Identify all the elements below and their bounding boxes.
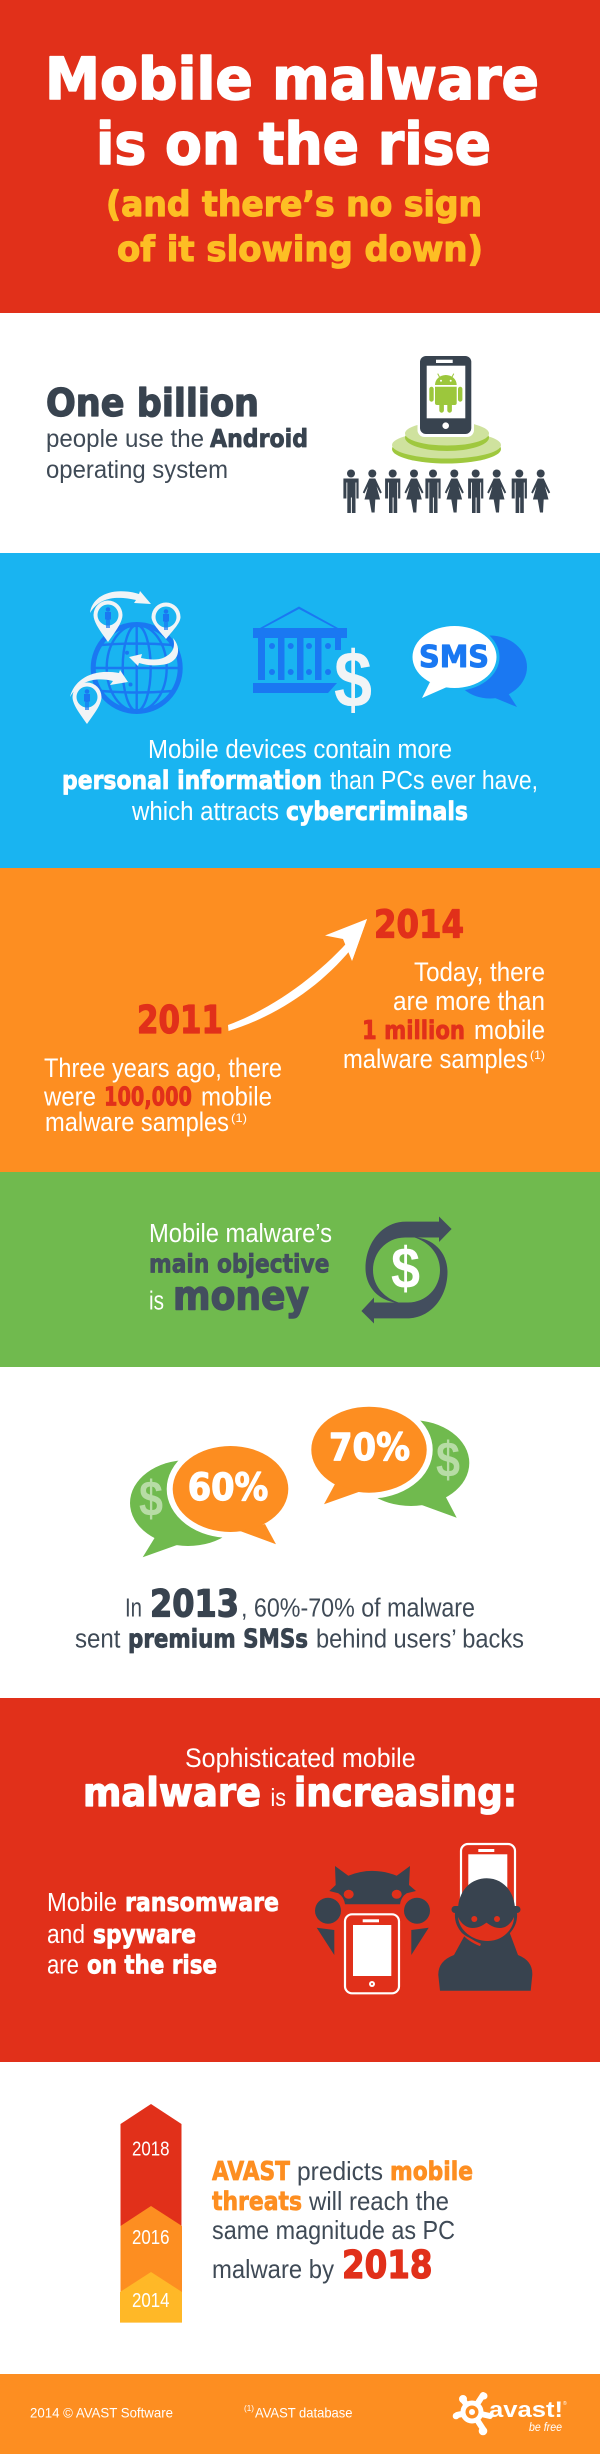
text block: 2013 premium SMS: 2013 <box>150 1583 239 1626</box>
text block: personal information: cybercriminals <box>286 797 468 827</box>
text block: main objective: main objective <box>149 1250 330 1280</box>
panel: one billion android users <box>0 313 600 553</box>
chart: rising arrow 2014 to 2018: 2018 <box>132 2139 170 2161</box>
text block: prediction: 2018 <box>342 2243 432 2287</box>
text block: personal information <box>62 736 538 827</box>
text block: three years ago: (1) <box>231 1111 247 1125</box>
text block: main objective: money <box>173 1274 309 1320</box>
text block: three years ago: Three years ago, there <box>44 1053 282 1083</box>
text block: prediction <box>212 2156 473 2287</box>
text block: 2013 premium SMS: In <box>125 1595 142 1623</box>
panel: personal information <box>0 553 600 868</box>
heading: malware increasing <box>83 1743 517 1816</box>
panel: title header <box>0 0 600 313</box>
text block: 2013 premium SMS <box>75 1583 524 1655</box>
heading: malware increasing: increasing: <box>294 1771 517 1816</box>
chart: rising arrow 2014 to 2018: 2014 <box>132 2290 170 2312</box>
text block: today: malware samples <box>343 1044 528 1074</box>
text block: personal information: than PCs ever have, <box>330 767 538 795</box>
text block: main objective: is <box>149 1288 164 1316</box>
text block: ransomware and spyware: on the rise <box>87 1950 217 1980</box>
logo: avast: avast! <box>489 2397 563 2422</box>
icon: 70% speech bubbles: $ <box>436 1432 460 1488</box>
icon: money cycle arrows <box>361 1216 452 1324</box>
text block: android users: people use the <box>46 425 204 453</box>
source note: AVAST database <box>255 2405 353 2421</box>
text block: android users <box>46 424 308 484</box>
panel: footer <box>0 2374 600 2454</box>
text block: 2013 premium SMS: , 60%-70% of malware <box>241 1595 475 1623</box>
text block: prediction: AVAST <box>212 2157 290 2187</box>
text block: main objective <box>149 1220 332 1320</box>
subtitle: (and there’s no sign <box>106 185 482 225</box>
icon: 70% speech bubbles <box>311 1407 469 1518</box>
logo: avast: ® <box>563 2400 567 2407</box>
icon: bank with dollar: $ <box>334 635 372 724</box>
title: Mobile malware <box>45 45 539 113</box>
panel: sophisticated malware <box>0 1698 600 2062</box>
icon: 60% speech bubbles: 60% <box>188 1466 268 1509</box>
text block: prediction: threats <box>212 2187 302 2217</box>
text block: today: Today, there <box>414 957 545 987</box>
text block: three years ago: malware samples <box>45 1107 229 1137</box>
text block: ransomware and spyware: spyware <box>93 1920 196 1950</box>
text block: prediction: same magnitude as PC <box>212 2215 455 2245</box>
icon: 60% speech bubbles <box>130 1446 288 1557</box>
text block: 2013 premium SMS: sent <box>75 1626 120 1654</box>
text block: 2013 premium SMS: premium SMSs <box>128 1625 308 1655</box>
text block: 2013 premium SMS: behind users’ backs <box>316 1626 524 1654</box>
text block: three years ago: were <box>43 1082 96 1112</box>
text block: today: mobile <box>474 1015 545 1045</box>
text block: android users: operating system <box>46 456 228 484</box>
text block: three years ago: mobile <box>201 1082 272 1112</box>
subtitle <box>106 185 483 270</box>
icon: SMS speech bubbles: SMS <box>419 640 489 675</box>
icon: phone on podium <box>392 356 501 464</box>
text block: prediction: mobile <box>390 2157 473 2187</box>
heading: malware increasing: Sophisticated mobile <box>185 1743 416 1773</box>
text block: main objective: Mobile malware’s <box>149 1220 332 1248</box>
panel: main objective money <box>0 1172 600 1367</box>
text block: today: 1 million <box>362 1016 465 1046</box>
text block: prediction: will reach the <box>308 2186 449 2216</box>
heading: malware increasing: malware <box>83 1771 261 1816</box>
text block: three years ago <box>43 1053 282 1137</box>
label: 2011: 2011 <box>137 998 223 1042</box>
text block: personal information: personal information <box>62 766 322 796</box>
text block: prediction: predicts <box>297 2156 383 2186</box>
icon: row of people <box>343 470 550 513</box>
panel: premium SMS share <box>0 1367 600 1698</box>
text block: personal information: which attracts <box>131 798 279 826</box>
label: 2014: 2014 <box>374 902 464 946</box>
subtitle: of it slowing down) <box>117 230 483 270</box>
arrow: growth <box>228 919 367 1031</box>
heading: one billion: One billion <box>46 381 259 425</box>
chart: rising arrow 2014 to 2018 <box>120 2104 182 2323</box>
text block: prediction: malware by <box>212 2254 334 2284</box>
icon: money cycle arrows: $ <box>391 1236 420 1301</box>
icon: 70% speech bubbles: 70% <box>329 1426 410 1469</box>
panel: malware growth 2011 to 2014 <box>0 868 600 1172</box>
copyright: 2014 © AVAST Software <box>30 2405 173 2421</box>
icon: ransomware monster with phone <box>315 1866 430 1993</box>
title <box>45 45 539 178</box>
icon: SMS speech bubbles <box>410 623 527 707</box>
icon: globe with pins <box>70 591 180 724</box>
text block: today: are more than <box>393 986 545 1016</box>
title: is on the rise <box>96 110 491 178</box>
text block: today <box>343 957 545 1074</box>
text block: three years ago: 100,000 <box>104 1082 192 1112</box>
text block: ransomware and spyware: are <box>47 1952 79 1980</box>
panel: avast prediction <box>0 2062 600 2374</box>
text block: ransomware and spyware: and <box>47 1921 85 1949</box>
text block: personal information: Mobile devices contain more <box>148 736 452 764</box>
chart: rising arrow 2014 to 2018: 2016 <box>132 2227 170 2249</box>
logo: avast <box>453 2393 567 2435</box>
text block: android users: Android <box>210 424 308 453</box>
icon: spy with phone <box>438 1844 532 1991</box>
source note: (1) <box>244 2404 254 2413</box>
icon: bank with dollar <box>253 606 372 724</box>
text block: ransomware and spyware <box>47 1888 279 1980</box>
heading: malware increasing: is <box>270 1784 286 1812</box>
text block: ransomware and spyware: ransomware <box>125 1888 279 1918</box>
logo: avast: be free <box>529 2420 562 2434</box>
text block: ransomware and spyware: Mobile <box>47 1889 117 1917</box>
text block: today: (1) <box>530 1048 545 1062</box>
icon: 60% speech bubbles: $ <box>139 1471 163 1527</box>
